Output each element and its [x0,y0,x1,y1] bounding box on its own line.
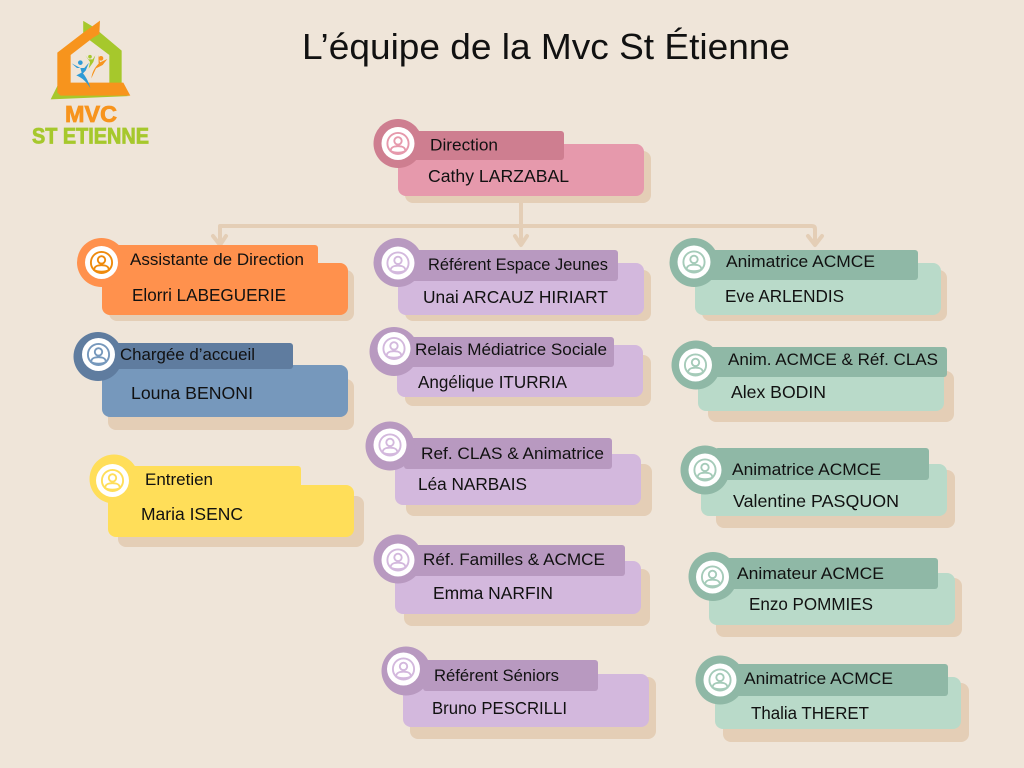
card: Référent Espace Jeunes: Unai ARCAUZ HIRIART [423,287,608,307]
card: Assistante de Direction [77,238,354,321]
card: Animateur ACMCE, Enzo POMMIES: Animateur ACMCE [737,564,884,583]
card: Direction: Cathy LARZABAL [428,166,569,186]
title: L’équipe de la Mvc St Étienne [302,26,790,67]
card: Animatrice ACMCE, Valentine PASQUON [680,446,955,528]
logo: MVC St Etienne: MVC [65,101,117,127]
card: Référent Séniors [382,646,656,739]
card: Animatrice ACMCE, Valentine PASQUON: Animatrice ACMCE [732,460,881,479]
card: Chargée d'accueil: Louna BENONI [131,383,253,403]
card: Animatrice ACMCE, Thalia THERET: Animatrice ACMCE [744,669,893,688]
card: Ref. CLAS & Animatrice: Léa NARBAIS [418,474,527,494]
card: Référent Séniors: Bruno PESCRILLI [432,698,567,718]
card: Ref. CLAS & Animatrice [366,422,652,516]
card: Animatrice ACMCE, Eve ARLENDIS: Animatrice ACMCE [726,252,875,271]
card: Relais Médiatrice Sociale: Relais Médiatrice Sociale [415,340,607,359]
card: Chargée d'accueil [74,332,354,430]
card: Relais Médiatrice Sociale: Angélique ITURRIA [418,372,567,392]
card: Référent Espace Jeunes [374,238,651,321]
card: Chargée d'accueil: Chargée d’accueil [120,345,255,364]
card: Anim. ACMCE & Réf. CLAS, Alex BODIN: Alex BODIN [731,382,826,402]
card: Relais Médiatrice Sociale [370,327,651,406]
card: Animatrice ACMCE, Thalia THERET: Thalia THERET [751,703,869,723]
card: Entretien: Maria ISENC [141,504,243,524]
card: Animatrice ACMCE, Valentine PASQUON: Valentine PASQUON [733,491,899,511]
card: Réf. Familles & ACMCE: Réf. Familles & ACMCE [423,550,605,569]
connector arrows [213,203,822,245]
card: Direction: Direction [430,136,498,154]
card: Anim. ACMCE & Réf. CLAS, Alex BODIN: Anim. ACMCE & Réf. CLAS [728,350,938,369]
card: Assistante de Direction: Elorri LABEGUERIE [132,285,286,305]
card: Animatrice ACMCE, Eve ARLENDIS [670,238,947,321]
logo: MVC St Etienne [32,21,149,148]
card: Référent Espace Jeunes: Référent Espace Jeunes [428,255,608,274]
logo: MVC St Etienne: ST ETIENNE [32,124,149,148]
card: Référent Séniors: Référent Séniors [434,666,559,685]
card: Direction [374,119,651,203]
card: Ref. CLAS & Animatrice: Ref. CLAS & Animatrice [421,444,604,463]
card: Réf. Familles & ACMCE: Emma NARFIN [433,583,553,603]
card: Entretien [90,454,364,547]
card: Assistante de Direction: Assistante de Direction [130,250,304,269]
card: Animatrice ACMCE, Eve ARLENDIS: Eve ARLENDIS [725,286,844,306]
card: Entretien: Entretien [145,470,213,489]
card: Animateur ACMCE, Enzo POMMIES: Enzo POMMIES [749,594,873,614]
card: Animatrice ACMCE, Thalia THERET [696,656,969,742]
card: Réf. Familles & ACMCE [374,534,650,626]
card: Anim. ACMCE & Réf. CLAS, Alex BODIN [672,340,954,422]
card: Animateur ACMCE, Enzo POMMIES [688,552,962,637]
